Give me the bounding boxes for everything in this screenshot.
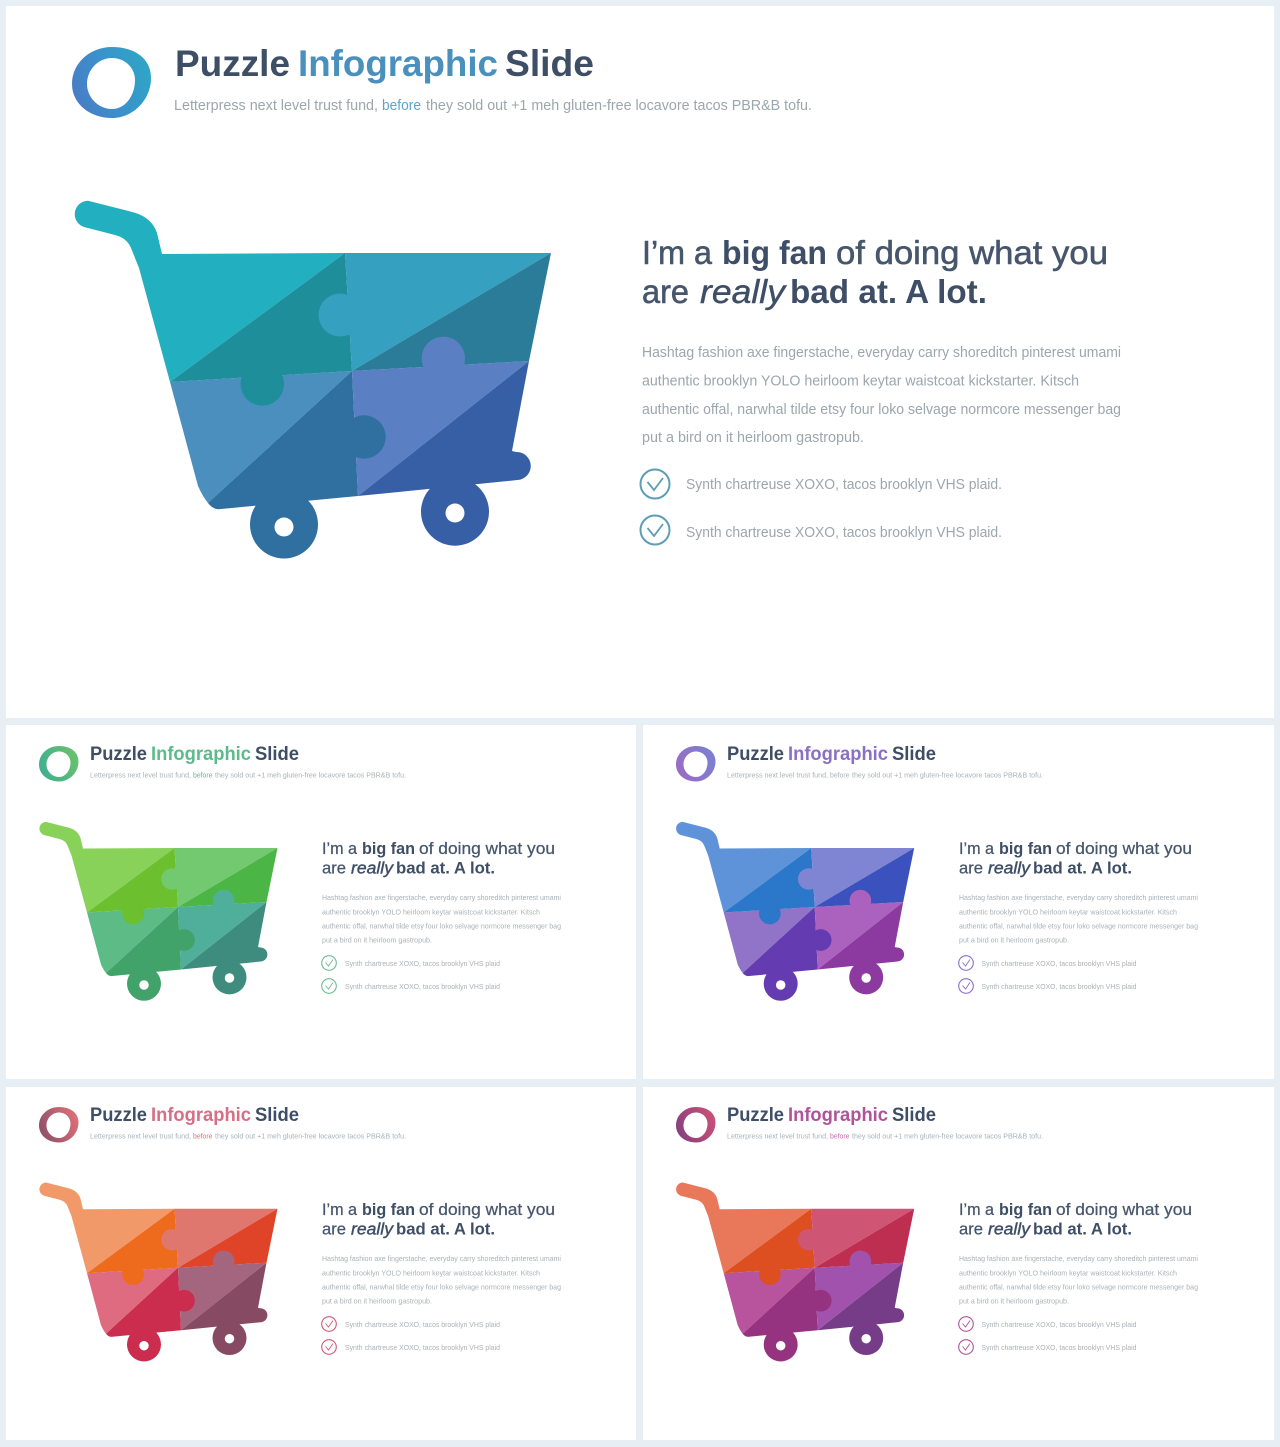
puzzle shopping cart (39, 822, 278, 1001)
heading (642, 234, 1108, 310)
check item 2: Synth chartreuse XOXO, tacos brooklyn VHS plaid (982, 982, 1136, 991)
heading: bad at. A lot. (396, 1220, 495, 1238)
heading: are (322, 1220, 346, 1238)
heading: big fan (362, 1201, 415, 1219)
icon: blue ring logo (72, 47, 151, 118)
body paragraph: put a bird on it heirloom gastropub. (322, 1296, 432, 1306)
body paragraph: authentic offal, narwhal tilde etsy four loko selvage normcore messenger bag (642, 402, 1121, 418)
subtitle: before (193, 770, 212, 780)
check item 2: Synth chartreuse XOXO, tacos brooklyn VHS plaid (345, 982, 500, 991)
heading: I’m a (322, 1201, 358, 1219)
body paragraph: put a bird on it heirloom gastropub. (959, 936, 1069, 944)
heading: really (700, 273, 788, 310)
check item 2 (322, 979, 500, 993)
title: Slide (892, 744, 936, 765)
heading (959, 1201, 1192, 1238)
body paragraph: Hashtag fashion axe fingerstache, everyday carry shoreditch pinterest umami (322, 1254, 561, 1263)
body paragraph: authentic brooklyn YOLO heirloom keytar waistcoat kickstarter. Kitsch (959, 908, 1177, 916)
body paragraph: authentic offal, narwhal tilde etsy four loko selvage normcore messenger bag (322, 1282, 561, 1292)
body paragraph (322, 1254, 561, 1306)
check item 1 (959, 1317, 1136, 1331)
heading: I’m a (959, 840, 995, 858)
title: Infographic (788, 744, 888, 765)
panel: red slide (6, 1087, 636, 1440)
title (727, 744, 936, 765)
check item 1 (322, 1317, 500, 1331)
heading: of doing what you (1056, 840, 1192, 858)
heading: I’m a (959, 1201, 995, 1219)
subtitle: they sold out +1 meh gluten-free locavore tacos PBR&B tofu. (852, 770, 1043, 780)
panel: main blue slide (6, 6, 1274, 718)
title: Puzzle (727, 1105, 784, 1126)
body paragraph: Hashtag fashion axe fingerstache, everyday carry shoreditch pinterest umami (959, 1254, 1198, 1263)
puzzle shopping cart (39, 1183, 278, 1361)
body paragraph: authentic brooklyn YOLO heirloom keytar waistcoat kickstarter. Kitsch (322, 908, 540, 916)
heading: big fan (722, 234, 827, 271)
puzzle piece top left with handle (75, 201, 352, 382)
title: Slide (892, 1105, 936, 1126)
check item 1: Synth chartreuse XOXO, tacos brooklyn VHS plaid (345, 1320, 500, 1329)
body paragraph (959, 893, 1198, 944)
icon: red ring logo (39, 1107, 78, 1142)
icon: purple ring logo (676, 746, 716, 782)
subtitle (174, 98, 812, 114)
subtitle: before (830, 770, 850, 780)
panel: magenta slide (643, 1087, 1274, 1440)
title: Puzzle (90, 744, 147, 765)
wheel right (421, 478, 489, 546)
icon: magenta ring logo (676, 1107, 716, 1142)
panel: green slide (6, 725, 636, 1079)
heading (959, 840, 1192, 878)
body paragraph: authentic brooklyn YOLO heirloom keytar waistcoat kickstarter. Kitsch (959, 1268, 1177, 1278)
heading: big fan (999, 1201, 1052, 1219)
subtitle: Letterpress next level trust fund, (90, 770, 191, 780)
heading: bad at. A lot. (396, 860, 495, 878)
subtitle (90, 1132, 406, 1140)
check item 1: Synth chartreuse XOXO, tacos brooklyn VHS plaid (982, 959, 1136, 968)
heading (322, 840, 555, 878)
check item 1 (959, 956, 1136, 970)
subtitle: before (193, 1132, 212, 1140)
body paragraph: Hashtag fashion axe fingerstache, everyday carry shoreditch pinterest umami (322, 893, 561, 902)
puzzle piece bottom left (170, 371, 358, 509)
puzzle shopping cart (676, 822, 914, 1001)
body paragraph: authentic brooklyn YOLO heirloom keytar waistcoat kickstarter. Kitsch (322, 1268, 540, 1278)
body paragraph (959, 1254, 1198, 1306)
body paragraph: authentic offal, narwhal tilde etsy four loko selvage normcore messenger bag (959, 1282, 1198, 1292)
body paragraph (322, 893, 561, 944)
heading: are (959, 860, 983, 878)
title: Infographic (298, 43, 498, 84)
heading: of doing what you (419, 840, 555, 858)
heading: bad at. A lot. (1033, 1220, 1132, 1238)
subtitle: Letterpress next level trust fund, (90, 1132, 191, 1140)
subtitle: they sold out +1 meh gluten-free locavore tacos PBR&B tofu. (426, 98, 812, 114)
check item 1: Synth chartreuse XOXO, tacos brooklyn VHS plaid (345, 959, 500, 968)
panel: purple slide (643, 725, 1274, 1079)
puzzle shopping cart (676, 1183, 914, 1361)
check item 2 (959, 979, 1136, 993)
subtitle: before (830, 1132, 850, 1140)
body paragraph: authentic offal, narwhal tilde etsy four loko selvage normcore messenger bag (322, 922, 561, 930)
title: Puzzle (90, 1105, 147, 1126)
title: Slide (505, 43, 594, 84)
title: Infographic (788, 1105, 888, 1126)
subtitle: before (382, 98, 421, 114)
check item 2: Synth chartreuse XOXO, tacos brooklyn VHS plaid (345, 1343, 500, 1352)
body paragraph: authentic brooklyn YOLO heirloom keytar waistcoat kickstarter. Kitsch (642, 374, 1079, 390)
check item 2: Synth chartreuse XOXO, tacos brooklyn VHS plaid (982, 1343, 1136, 1352)
title (175, 43, 594, 84)
title: Infographic (151, 1105, 251, 1126)
check item 2: Synth chartreuse XOXO, tacos brooklyn VHS plaid. (686, 525, 1002, 541)
puzzle shopping cart (75, 201, 551, 558)
title (90, 1105, 299, 1126)
title: Puzzle (727, 744, 784, 765)
heading: bad at. A lot. (790, 273, 987, 310)
subtitle: Letterpress next level trust fund, (727, 1132, 828, 1140)
heading: I’m a (642, 234, 713, 271)
body paragraph: put a bird on it heirloom gastropub. (959, 1296, 1069, 1306)
title: Puzzle (175, 43, 290, 84)
subtitle: Letterpress next level trust fund, (174, 98, 378, 114)
check item 1 (640, 470, 1002, 498)
wheel left (250, 490, 318, 558)
check item 1 (322, 956, 500, 970)
subtitle (90, 770, 406, 780)
heading: really (988, 860, 1032, 878)
heading: of doing what you (419, 1201, 555, 1219)
subtitle (727, 1132, 1043, 1140)
heading: big fan (999, 840, 1052, 858)
subtitle: they sold out +1 meh gluten-free locavore tacos PBR&B tofu. (215, 1132, 406, 1140)
body paragraph (642, 345, 1121, 446)
body paragraph: put a bird on it heirloom gastropub. (322, 936, 432, 944)
icon: green ring logo (39, 746, 78, 782)
puzzle knobs (241, 294, 465, 459)
check item 2 (322, 1340, 500, 1354)
body paragraph: Hashtag fashion axe fingerstache, everyday carry shoreditch pinterest umami (642, 345, 1121, 361)
subtitle: Letterpress next level trust fund, (727, 770, 828, 780)
heading: big fan (362, 840, 415, 858)
body paragraph: put a bird on it heirloom gastropub. (642, 430, 864, 446)
subtitle (727, 770, 1043, 780)
check item 2 (959, 1340, 1136, 1354)
body paragraph: authentic offal, narwhal tilde etsy four loko selvage normcore messenger bag (959, 922, 1198, 930)
title: Slide (255, 1105, 299, 1126)
heading: bad at. A lot. (1033, 860, 1132, 878)
heading: really (351, 860, 395, 878)
heading: really (351, 1220, 395, 1238)
check item 1: Synth chartreuse XOXO, tacos brooklyn VHS plaid. (686, 477, 1002, 493)
heading: of doing what you (1056, 1201, 1192, 1219)
heading (322, 1201, 555, 1238)
heading: are (642, 273, 689, 310)
check item 2 (640, 516, 1002, 544)
subtitle: they sold out +1 meh gluten-free locavore tacos PBR&B tofu. (852, 1132, 1043, 1140)
heading: I’m a (322, 840, 358, 858)
subtitle: they sold out +1 meh gluten-free locavore tacos PBR&B tofu. (215, 770, 406, 780)
puzzle piece top right (345, 253, 551, 371)
heading: of doing what you (836, 234, 1108, 271)
body paragraph: Hashtag fashion axe fingerstache, everyday carry shoreditch pinterest umami (959, 893, 1198, 902)
check item 1: Synth chartreuse XOXO, tacos brooklyn VHS plaid (982, 1320, 1136, 1329)
title (727, 1105, 936, 1126)
title: Infographic (151, 744, 251, 765)
puzzle piece bottom right (352, 361, 531, 496)
title: Slide (255, 744, 299, 765)
heading: are (959, 1220, 983, 1238)
heading: are (322, 860, 346, 878)
title (90, 744, 299, 765)
heading: really (988, 1220, 1032, 1238)
